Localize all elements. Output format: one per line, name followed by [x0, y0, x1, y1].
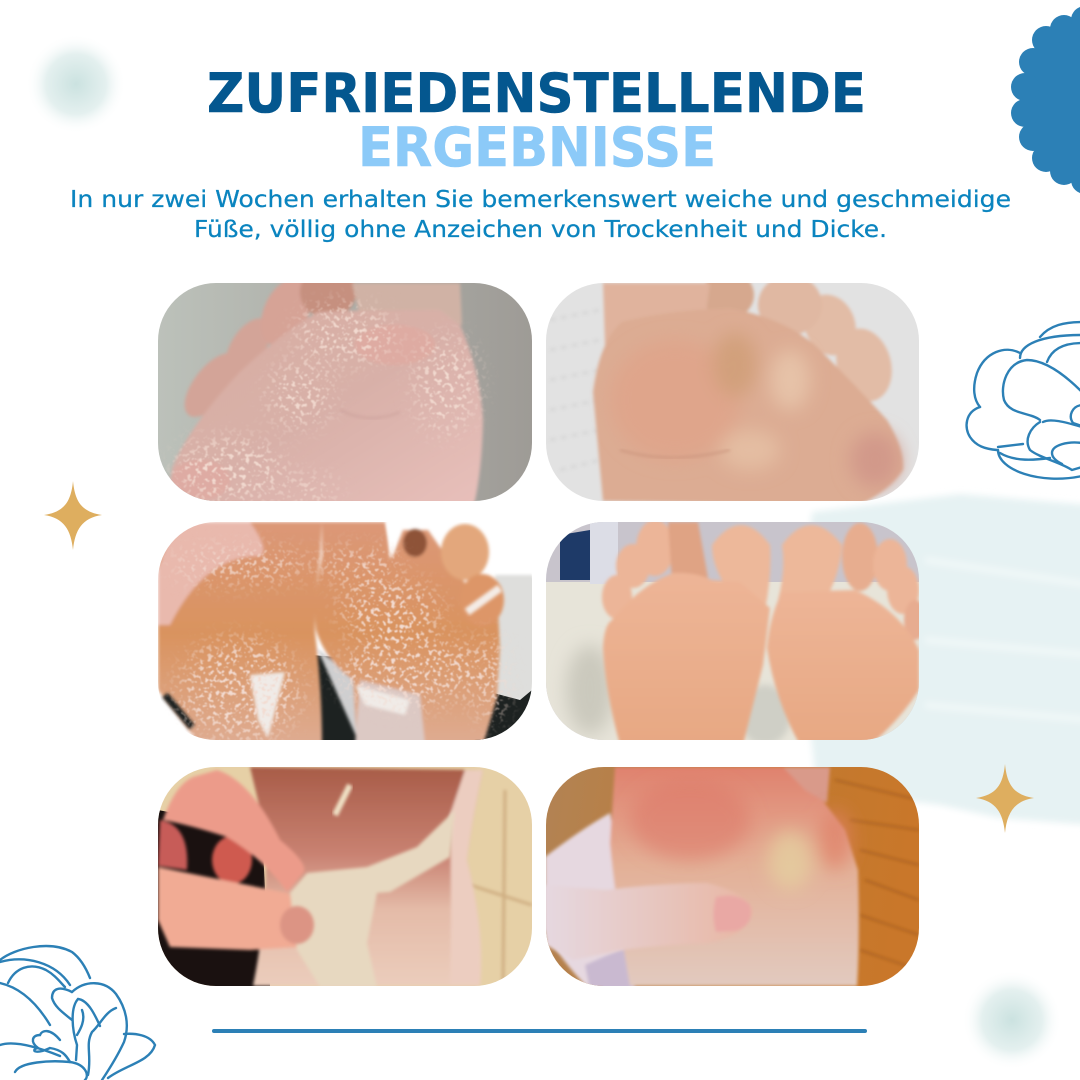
photo: peeling feet before, middle left	[158, 522, 535, 745]
icon: flower outline, bottom left	[0, 946, 155, 1080]
title line 2: ERGEBNISSE	[358, 116, 716, 179]
icon: gold sparkle, right	[976, 764, 1034, 833]
subtitle line 2: Füße, völlig ohne Anzeichen von Trockenheit und Dicke.	[194, 217, 887, 243]
photo: smooth feet after, middle right	[546, 520, 926, 745]
watercolor wash: right side	[800, 494, 1080, 825]
decorative glow: top left	[26, 34, 126, 134]
title	[207, 62, 866, 179]
bottom divider line	[212, 1029, 867, 1033]
photo: thumb pressing healed sole, bottom right	[545, 767, 919, 990]
photo: peeling heel skin being pulled, bottom left	[158, 767, 532, 987]
subtitle line 1: In nur zwei Wochen erhalten Sie bemerkenswert weiche und geschmeidige	[70, 187, 1011, 213]
photo: smooth foot after, top right	[546, 271, 919, 505]
icon: scalloped circle	[1011, 6, 1080, 194]
title line 1: ZUFRIEDENSTELLENDE	[207, 62, 866, 125]
photo: peeling foot before, top left	[158, 266, 532, 505]
decorative glow: bottom right	[962, 970, 1062, 1070]
icon: gold sparkle, left	[44, 481, 102, 550]
subtitle	[70, 187, 1011, 243]
icon: flower outline, right	[967, 322, 1080, 479]
